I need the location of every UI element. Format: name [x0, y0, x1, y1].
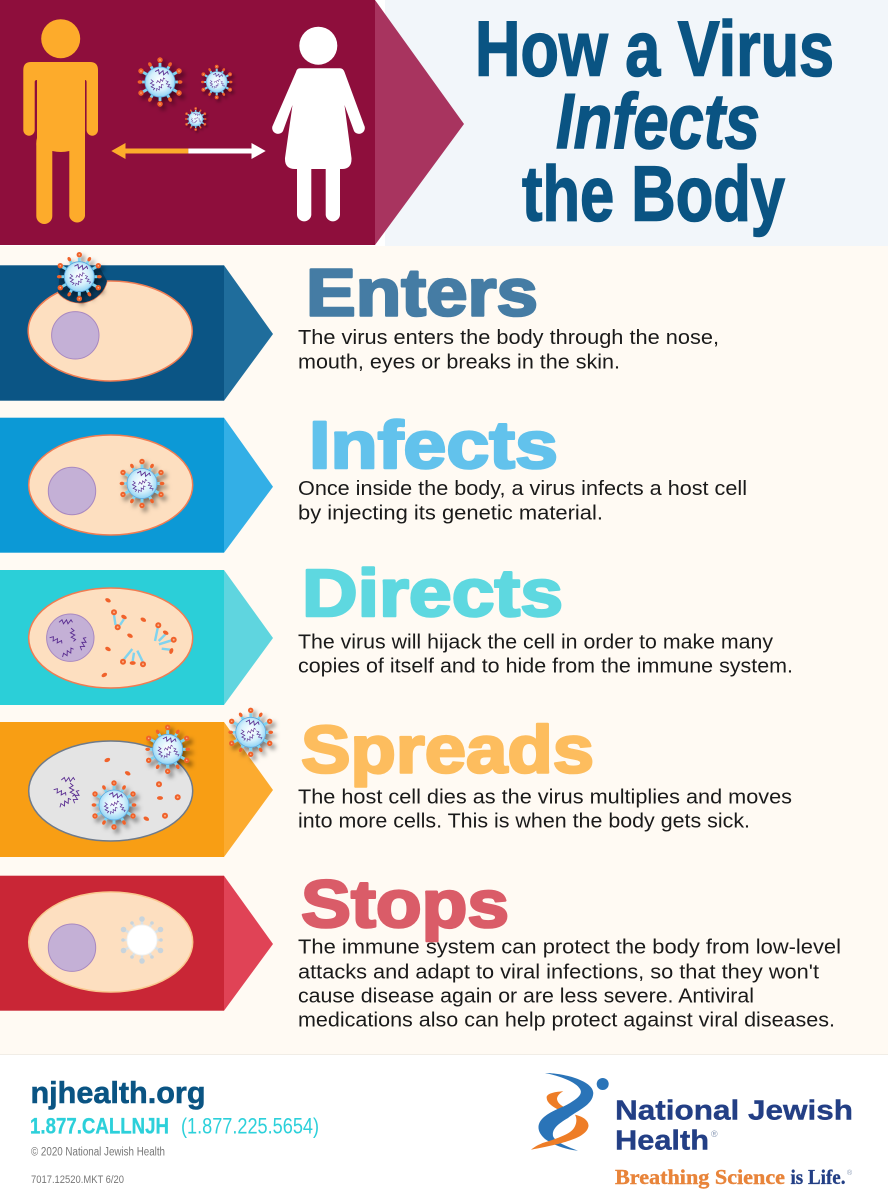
cell	[29, 588, 193, 688]
icon: virus small	[185, 107, 206, 131]
double-headed distance arrow	[111, 143, 266, 159]
logo: wordmark: Health	[615, 1124, 709, 1155]
logo: tagline: Breathing Science	[615, 1165, 785, 1189]
phone numbers: (1.877.225.5654)	[181, 1113, 319, 1138]
heading: Infects: Infects	[309, 408, 558, 483]
panel: Enters illustration	[0, 252, 273, 401]
text: Stops description: medications also can help protect against viral diseases.	[298, 1010, 835, 1032]
virus inside cell	[120, 459, 164, 508]
text: Spreads description: into more cells. This is when the body gets sick.	[298, 810, 750, 832]
virus entering	[57, 252, 102, 301]
website: njhealth.org	[30, 1075, 206, 1110]
title	[475, 4, 834, 238]
logo: tagline: is Life.	[790, 1165, 846, 1189]
heading: Enters: Enters	[306, 256, 538, 330]
panel: Infects illustration	[0, 418, 273, 553]
text: Spreads description: The host cell dies as the virus multiplies and moves	[298, 786, 792, 808]
nucleus with genetic material	[47, 614, 94, 661]
text: Directs description	[298, 631, 793, 678]
dying cell	[29, 741, 193, 841]
cell	[29, 435, 193, 535]
phone numbers	[30, 1113, 319, 1138]
destroyed virus	[121, 916, 163, 964]
nucleus	[52, 312, 99, 359]
title: the Body	[522, 150, 785, 238]
text: Stops description	[298, 936, 841, 1032]
banner maroon panel	[0, 0, 375, 245]
logo: tagline	[615, 1165, 853, 1189]
virus outside cell	[228, 708, 273, 757]
logo: wordmark: National Jewish	[615, 1094, 853, 1125]
logo: wordmark: ®	[711, 1129, 718, 1139]
job code: 7017.12520.MKT 6/20	[31, 1174, 124, 1186]
viral parts being assembled	[101, 597, 177, 678]
banner arrow tip	[375, 0, 464, 245]
text: Spreads description	[298, 786, 792, 832]
title: Infects	[556, 77, 760, 165]
text: Stops description: cause disease again or are less severe. Antiviral	[298, 986, 754, 1008]
icon: virus large	[138, 57, 182, 107]
icon: man figure	[23, 19, 98, 224]
phone numbers: 1.877.CALLNJH	[30, 1113, 169, 1138]
panel: Spreads illustration	[0, 708, 273, 857]
loose genetic material and parts	[53, 757, 181, 822]
logo: wordmark	[615, 1094, 853, 1155]
text: Infects description: Once inside the body, a virus infects a host cell	[298, 478, 747, 500]
nucleus	[48, 924, 96, 971]
heading: Stops: Stops	[301, 867, 509, 942]
cell with bite	[28, 281, 192, 381]
virus in cell	[92, 780, 136, 830]
panel: Stops illustration	[0, 876, 273, 1011]
bite shadow	[58, 268, 107, 303]
text: Enters description: The virus enters the body through the nose,	[298, 327, 719, 349]
text: Directs description: copies of itself and to hide from the immune system.	[298, 656, 793, 678]
logo: helix icon	[531, 1073, 609, 1151]
icon: virus medium	[201, 65, 232, 99]
cell	[29, 892, 193, 992]
text: Stops description: attacks and adapt to viral infections, so that they won't	[298, 961, 819, 983]
footer	[0, 1054, 888, 1189]
icon: woman figure	[272, 27, 365, 221]
panel: Directs illustration	[0, 570, 273, 705]
logo: tagline: ®	[847, 1169, 853, 1177]
heading: Spreads: Spreads	[301, 712, 594, 788]
text: Directs description: The virus will hijack the cell in order to make many	[298, 631, 773, 653]
text: Enters description: mouth, eyes or breaks in the skin.	[298, 351, 620, 373]
virus leaving cell	[145, 725, 190, 774]
header banner	[0, 0, 888, 246]
text: Stops description: The immune system can protect the body from low-level	[298, 936, 841, 958]
nucleus	[48, 467, 96, 515]
copyright: © 2020 National Jewish Health	[31, 1147, 165, 1159]
text: Infects description	[298, 478, 747, 524]
text: Enters description	[298, 327, 719, 373]
text: Infects description: by injecting its genetic material.	[298, 502, 603, 524]
heading: Directs: Directs	[302, 556, 563, 631]
